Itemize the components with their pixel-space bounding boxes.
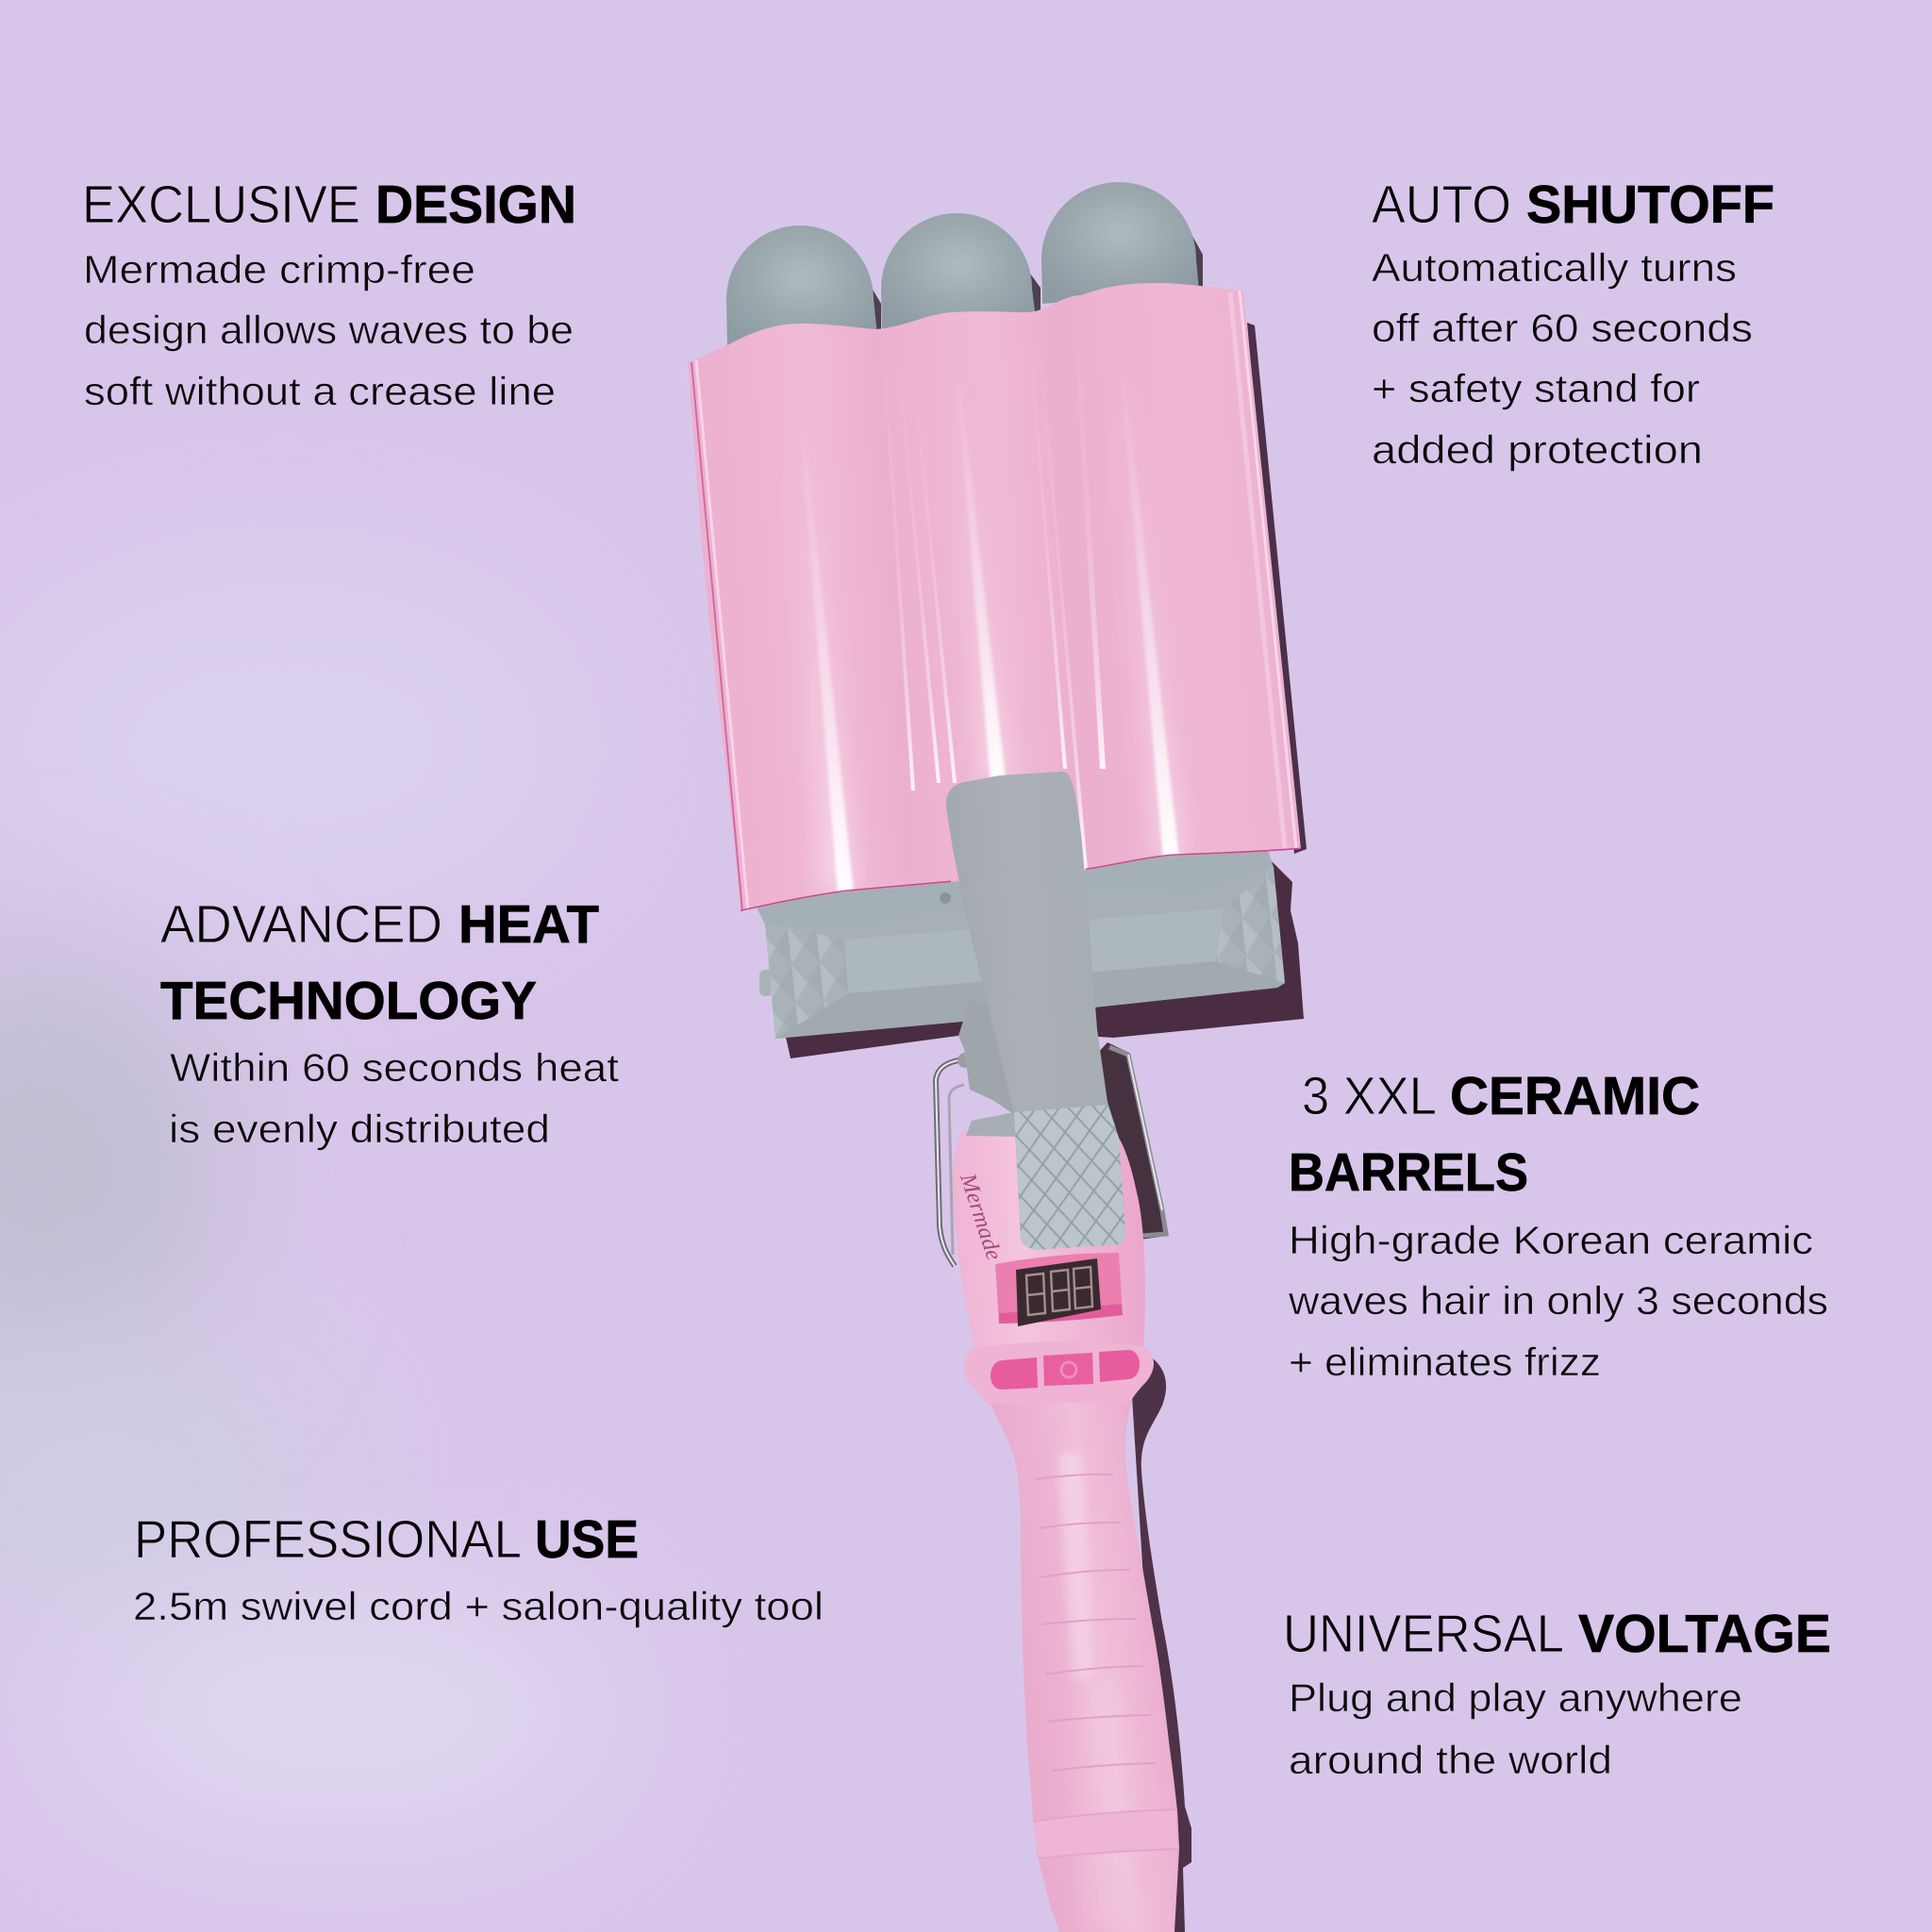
description: Within 60 seconds heat (170, 1045, 619, 1090)
barrel cover (688, 283, 1301, 911)
feature: auto shutoff (1372, 175, 1774, 472)
shadow behind crossbar (765, 854, 1304, 1058)
description: High-grade Korean ceramic (1289, 1218, 1813, 1262)
description: design allows waves to be (84, 308, 574, 352)
heading: VOLTAGE (1578, 1604, 1831, 1664)
heading (160, 894, 599, 1031)
crossbar (755, 840, 1285, 1039)
description: Mermade crimp-free (83, 247, 475, 291)
heading: UNIVERSAL (1283, 1604, 1564, 1664)
heading: BARRELS (1289, 1142, 1528, 1203)
button: left (991, 1357, 1038, 1390)
feature: exclusive design (82, 175, 576, 413)
button: power (1043, 1353, 1093, 1386)
soft sheen (811, 649, 860, 892)
LCD digits (1026, 1267, 1092, 1315)
button: right (1099, 1350, 1140, 1382)
heading (1289, 1066, 1700, 1203)
heading: HEAT (458, 894, 599, 955)
description: Automatically turns (1372, 245, 1737, 290)
curling iron product illustration (688, 182, 1307, 1932)
description: waves hair in only 3 seconds (1288, 1278, 1828, 1323)
highlight streaks (809, 505, 855, 892)
feature: professional use (133, 1509, 824, 1628)
heading: 3 XXL (1302, 1066, 1437, 1126)
barrel bases (755, 840, 1274, 943)
heading: ADVANCED (160, 894, 442, 955)
heading: AUTO (1372, 175, 1511, 235)
description: + safety stand for (1372, 366, 1700, 410)
side knob (759, 970, 773, 996)
feature: advanced heat technology (160, 894, 619, 1151)
heading: EXCLUSIVE (82, 175, 360, 235)
description: Plug and play anywhere (1289, 1675, 1742, 1720)
handle grip (988, 1399, 1179, 1932)
display panel (995, 1253, 1123, 1324)
description: added protection (1372, 427, 1703, 472)
description: off after 60 seconds (1372, 306, 1753, 350)
brand script: Mermade (955, 1170, 1006, 1264)
heading (1283, 1604, 1831, 1664)
icon: ceramic barrel tips (726, 182, 1203, 351)
shadow behind lower handle (1132, 1358, 1191, 1932)
description: is evenly distributed (169, 1107, 550, 1151)
heading: CERAMIC (1450, 1066, 1700, 1126)
heading: TECHNOLOGY (160, 971, 537, 1031)
lattice grip (1014, 1105, 1125, 1250)
heading: PROFESSIONAL (134, 1509, 522, 1570)
lower body with LCD (952, 1111, 1145, 1349)
description (1372, 245, 1753, 472)
heading: DESIGN (375, 175, 576, 235)
description: around the world (1289, 1738, 1612, 1782)
description (169, 1045, 619, 1151)
description: soft without a crease line (84, 369, 556, 413)
control ring with buttons (964, 1341, 1154, 1404)
clamp lever (946, 772, 1125, 1250)
description (1288, 1218, 1828, 1384)
description: 2.5m swivel cord + salon-quality tool (133, 1584, 824, 1628)
grip texture (765, 923, 848, 1039)
feature: ceramic barrels (1288, 1066, 1828, 1384)
description: + eliminates frizz (1289, 1340, 1601, 1384)
description (1289, 1675, 1742, 1782)
description (83, 247, 574, 413)
metal wire stand (936, 1042, 1167, 1266)
shadow right of barrel cover (1247, 323, 1307, 854)
bar body (765, 867, 1285, 1039)
heading: SHUTOFF (1526, 175, 1774, 235)
groove lines (895, 515, 1106, 870)
feature: universal voltage (1283, 1604, 1831, 1782)
heading (82, 175, 576, 235)
heading (1372, 175, 1774, 235)
heading: USE (535, 1509, 639, 1570)
